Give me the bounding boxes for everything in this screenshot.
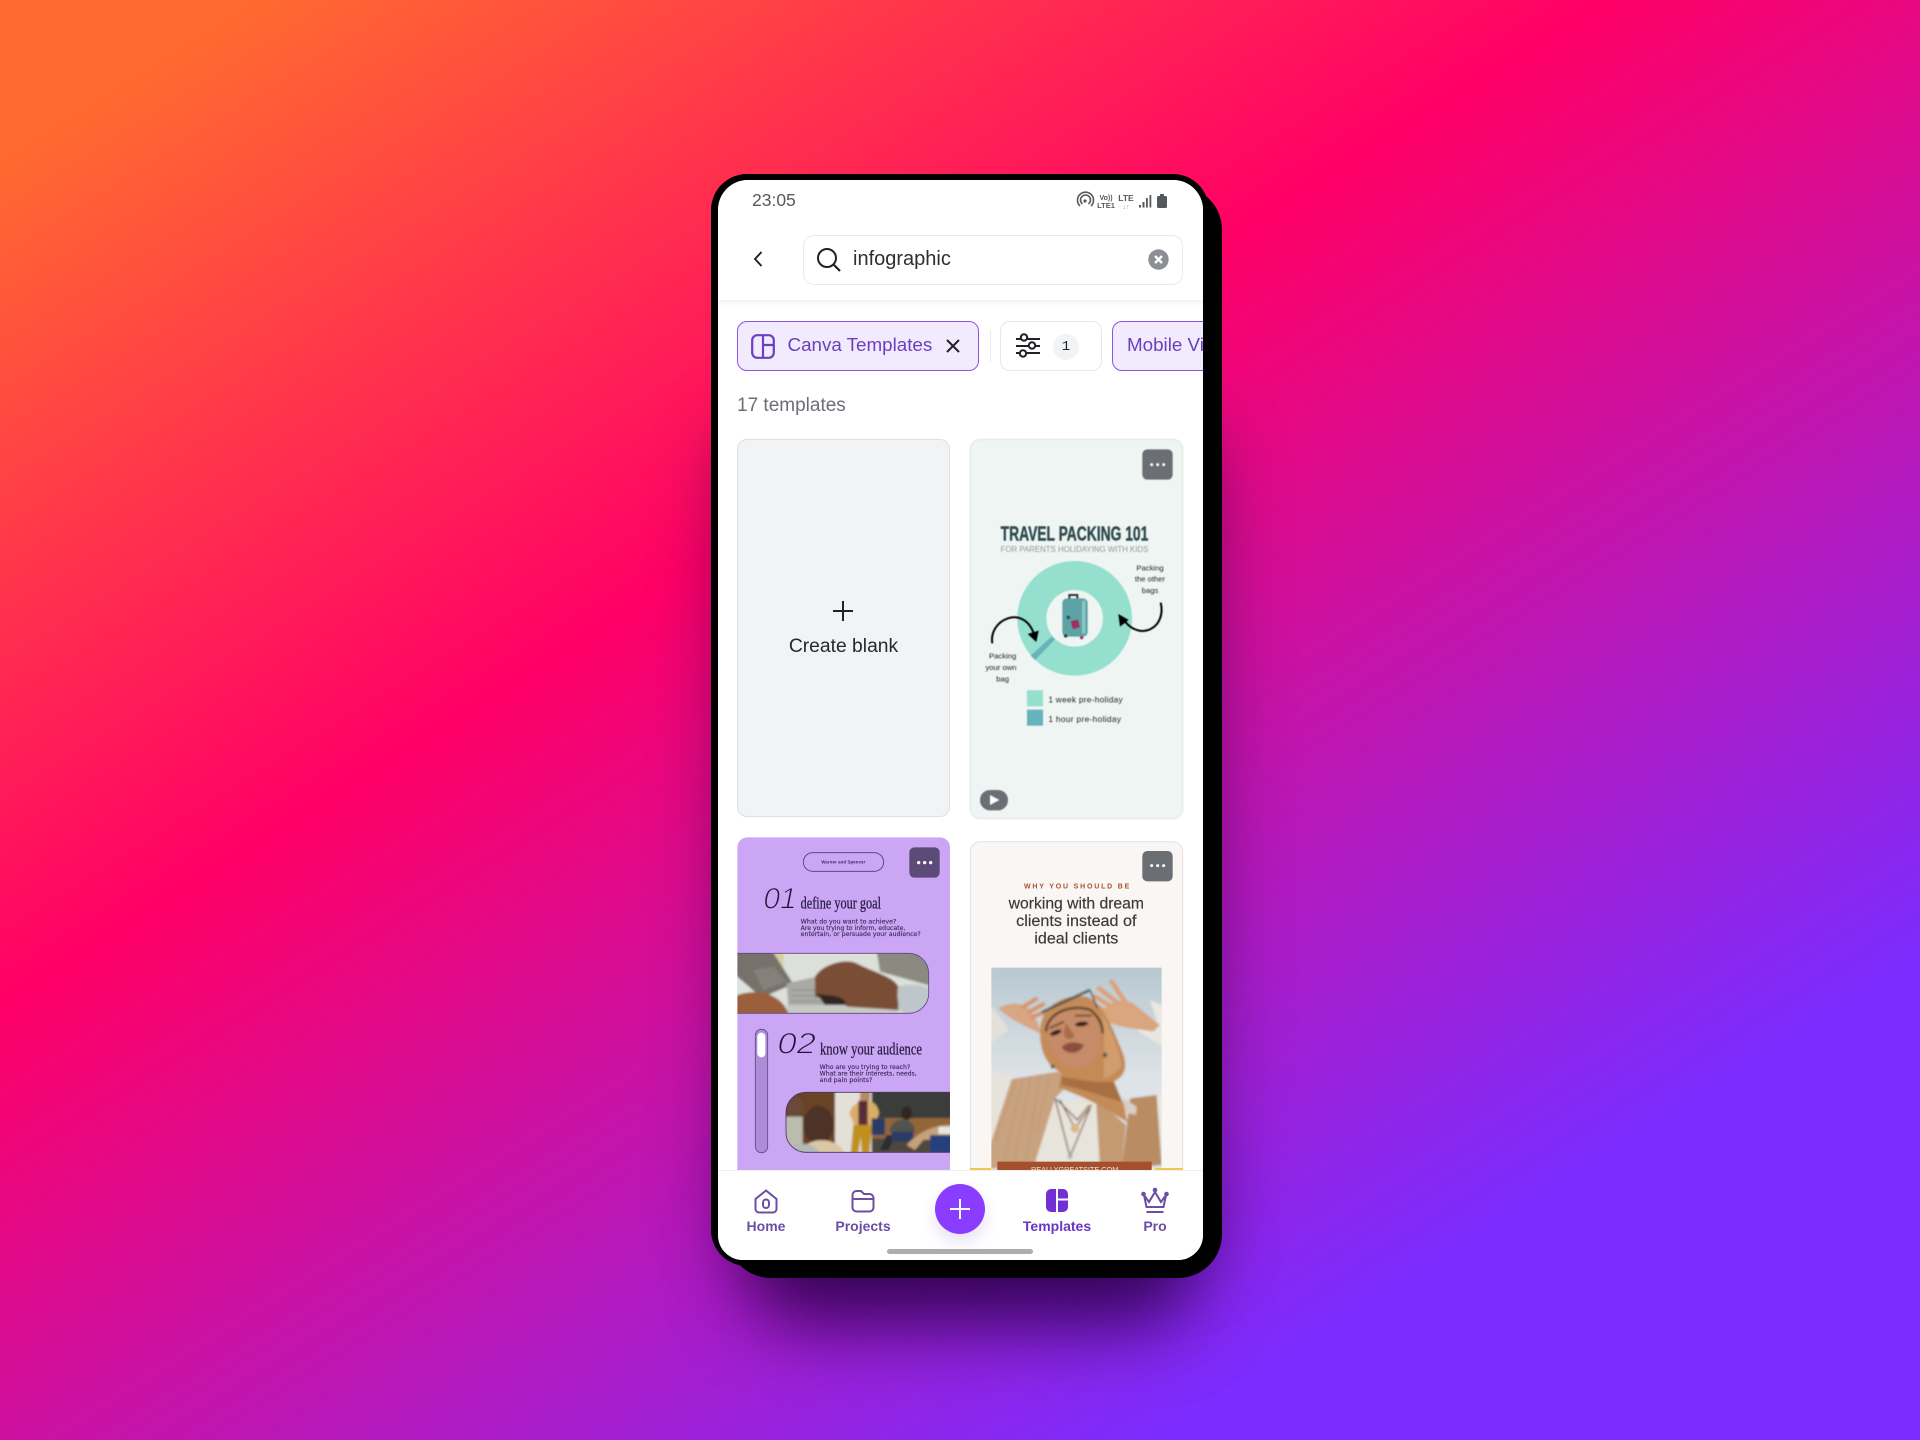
phone side shadow [730,420,1210,1260]
status bar icons: LTE [1118,193,1134,203]
label: packing your own bag: bag [996,675,1009,684]
icon: back chevron [754,251,762,267]
card: dream clients template [970,841,1184,1170]
phone front bezel [711,174,1209,1266]
step description 2: and pain points? [820,1077,872,1084]
scroll slider [755,1029,768,1153]
nav item: projects [835,1190,891,1234]
icon: clear search [1148,249,1169,270]
yellow card edge left [970,1168,991,1170]
card: create blank [737,439,950,817]
nav item: pro [1141,1188,1169,1234]
step description 1: What do you want to achieve? [801,919,896,926]
icon: sliders [1016,333,1040,358]
card: travel packing template [970,438,1184,820]
template headline: working with dream [1008,896,1144,913]
photo: audience presentation [783,1090,952,1153]
phone screen [718,180,1203,1260]
step heading 2: know your audience [820,1039,922,1058]
icon: templates [1046,1189,1068,1212]
step description 2 [820,1064,917,1084]
home label: Home [747,1218,785,1234]
yellow card edge right [1155,1168,1183,1170]
icon: home [754,1189,778,1214]
icon: more options [1142,851,1173,881]
step heading 1: define your goal [801,893,881,912]
filter count badge: 1 [1062,339,1070,355]
chip label: Canva Templates [788,334,932,355]
status bar icons [1076,191,1167,211]
template subtitle: FOR PARENTS HOLIDAYING WITH KIDS [1001,544,1149,554]
filter chip: settings [1000,321,1102,371]
icon: video play [980,790,1008,810]
header bar [717,180,1204,300]
create blank label: Create blank [789,636,898,657]
search query text: infographic [853,248,951,270]
step description 1: Are you trying to inform, educate, [801,925,905,932]
photo: woman in headscarf [991,968,1162,1170]
icon: suitcase [1062,595,1088,639]
filter chip: Mobile Video [1112,321,1232,371]
legend [1027,690,1123,726]
donut chart [1031,576,1118,661]
filter chip: Canva Templates [737,321,978,371]
label: packing your own bag: your own [985,663,1017,672]
label: packing the other bags: Packing [1136,563,1164,572]
icon: more options [909,847,940,878]
step number 02: 02 [777,1028,816,1061]
icon: more options [1142,449,1173,480]
photo: hands on laptop [737,954,928,1013]
icon: search [817,248,841,272]
card: purple define your goal template [737,837,950,1170]
phone back body [727,186,1222,1278]
template headline: ideal clients [1034,930,1119,947]
legend: 1 hour pre-holiday [1048,714,1122,724]
nav item: home [747,1189,785,1234]
legend: 1 week pre-holiday [1048,695,1123,705]
phone [711,174,1222,1278]
icon: plus [950,1199,970,1219]
icon: folder [852,1190,874,1212]
step description 2: What are their interests, needs, [820,1071,917,1078]
label: packing the other bags: the other [1135,575,1166,584]
bottom navigation bar [717,1170,1204,1260]
nav item: templates [1023,1189,1091,1234]
home indicator [887,1249,1033,1254]
label: packing your own bag [985,652,1017,684]
arrow: other bags [1118,603,1162,631]
brand pill [803,853,884,871]
status bar time: 23:05 [752,190,796,210]
icon: close chip [946,339,960,353]
search box [803,235,1183,285]
projects label: Projects [835,1218,891,1234]
label: packing the other bags: bags [1142,586,1158,595]
status bar icons: Vo)) [1099,195,1113,202]
icon: crown [1141,1188,1169,1213]
template count: 17 templates [737,395,846,416]
templates label: Templates [1023,1218,1091,1234]
step description 2: Who are you trying to reach? [820,1064,910,1071]
label: packing the other bags [1135,563,1166,595]
template headline: clients instead of [1016,913,1137,930]
filter count badge [1053,334,1079,360]
template headline [1008,896,1144,947]
button: add new design [935,1184,985,1234]
step description 1: entertain, or persuade your audience? [801,931,921,938]
label: packing your own bag: Packing [989,652,1016,661]
pro label: Pro [1143,1218,1167,1234]
kicker text: WHY YOU SHOULD BE [1024,883,1130,890]
arrow: own bag [992,617,1039,643]
icon: plus [833,601,853,621]
step number 01: 01 [763,883,797,916]
icon: templates layout [751,334,775,359]
status bar icons: ↓↑ [1122,204,1130,211]
step description 1 [801,919,921,938]
phone bottom shadow [745,1190,1195,1325]
brand pill: Warner and Spencer [821,860,866,865]
status bar icons: LTE1 [1097,201,1115,210]
